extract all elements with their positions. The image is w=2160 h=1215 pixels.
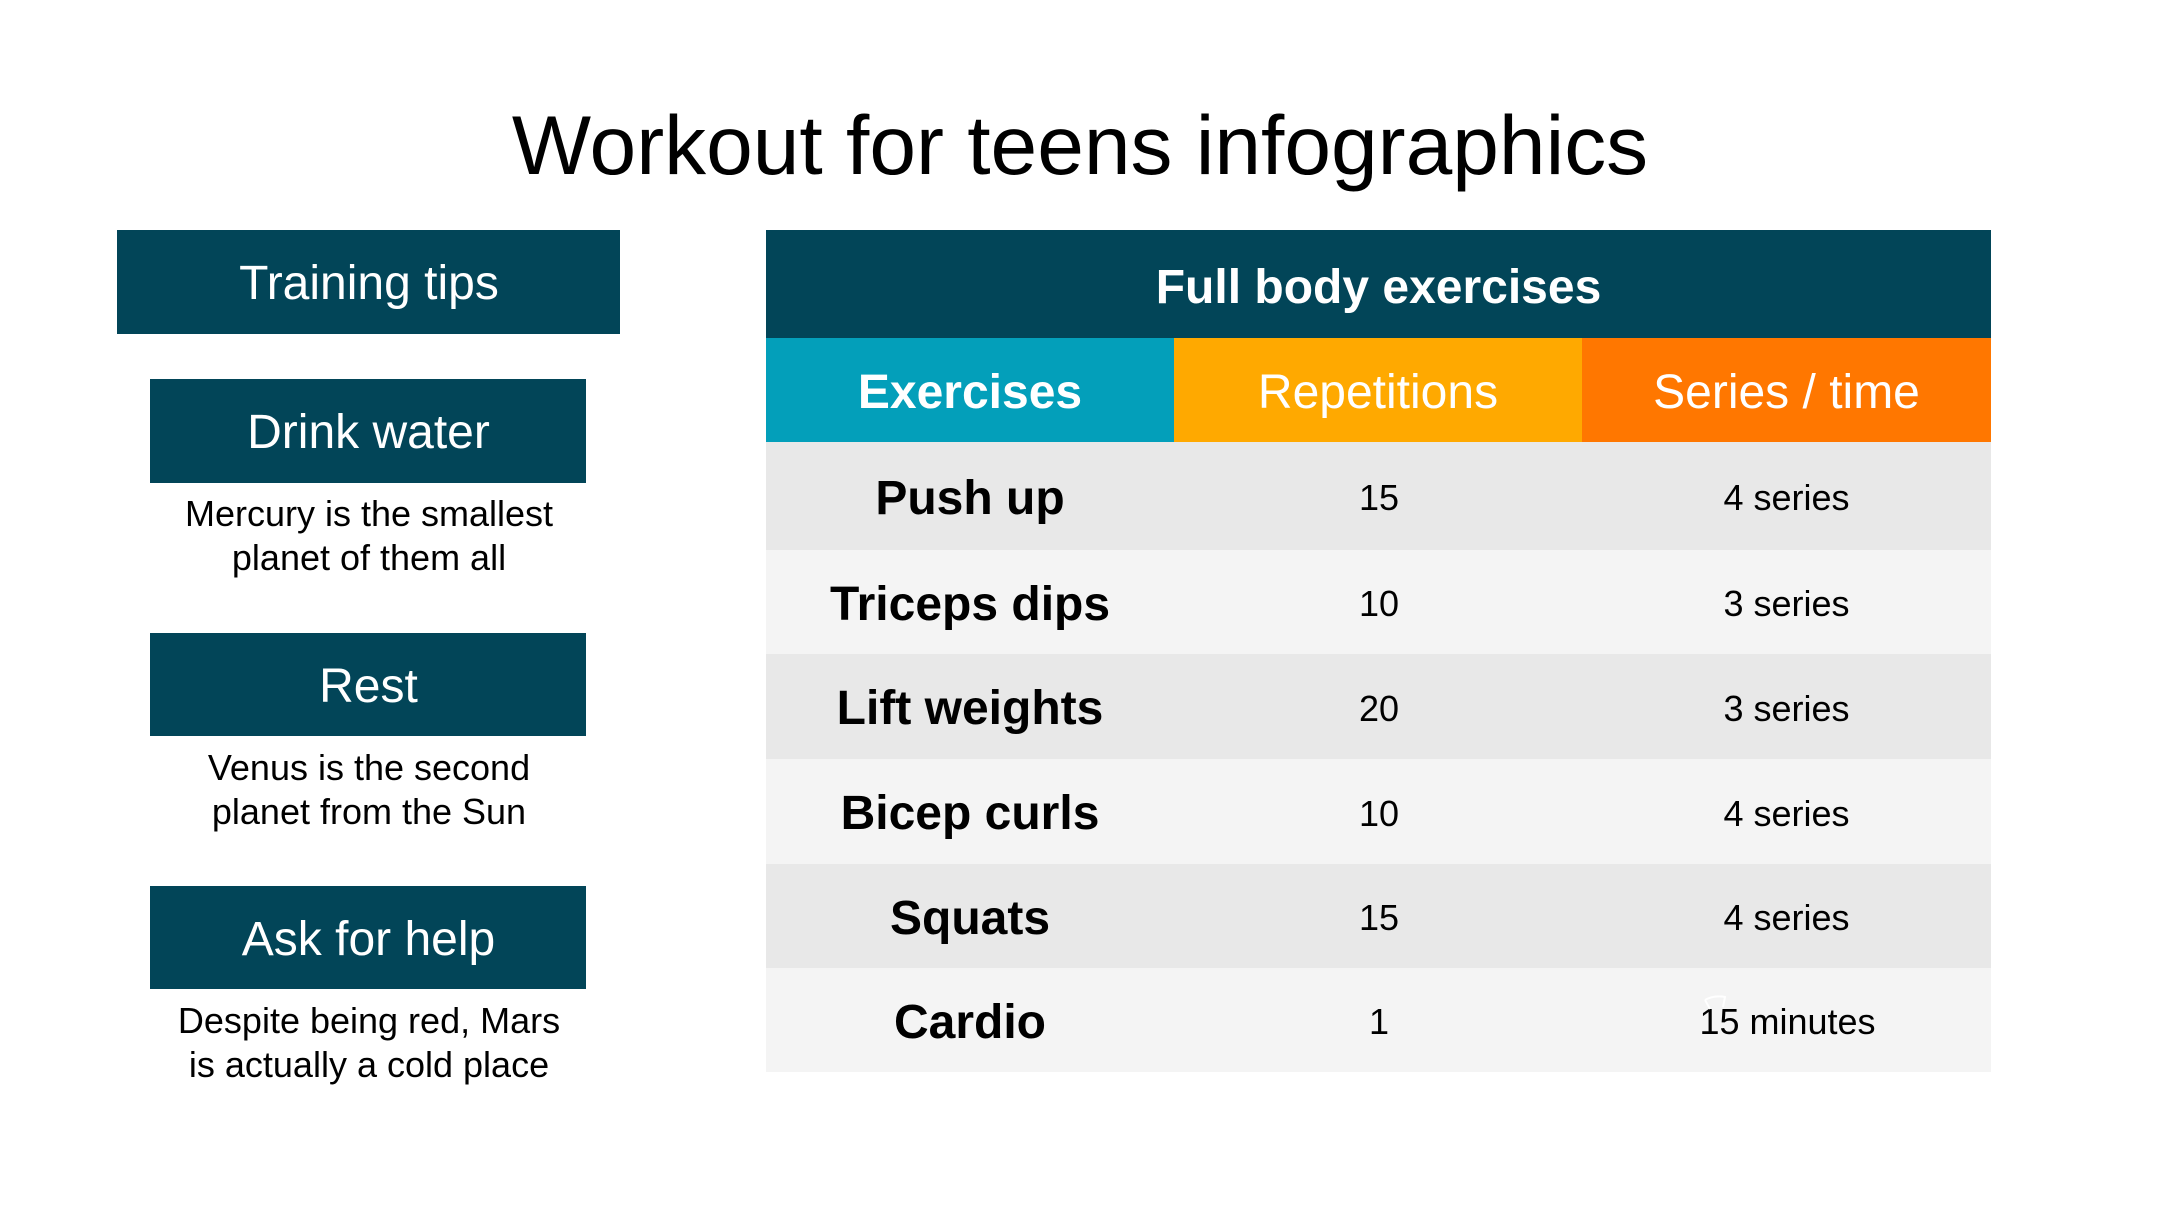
- row: cardio: [766, 968, 1991, 1072]
- row: lift weights: 20: [1359, 688, 1399, 728]
- tip: rest: [150, 633, 586, 832]
- tip text: planet of them all: [232, 537, 506, 578]
- row: lift weights: 3 series: [1723, 688, 1850, 728]
- row: cardio: 15 minutes: [1699, 1001, 1876, 1042]
- tip text: [185, 493, 553, 578]
- heading: training tips: Training tips: [239, 257, 499, 310]
- row: push up: Push up: [875, 472, 1065, 524]
- icon: small white arc over the 15 minutes label: [1704, 996, 1726, 1010]
- tip heading: Rest: [319, 660, 418, 713]
- row: squats: Squats: [890, 892, 1050, 944]
- column header: series / time: [1582, 338, 1991, 442]
- column header: exercises: [766, 338, 1174, 442]
- row: bicep curls: 10: [1359, 792, 1399, 834]
- tip heading: Ask for help: [242, 913, 495, 966]
- table title: [766, 230, 1991, 338]
- tip text: is actually a cold place: [189, 1044, 549, 1085]
- row: push up: 15: [1359, 477, 1399, 518]
- row: squats: [766, 864, 1991, 968]
- tip heading: Drink water: [247, 406, 490, 459]
- row: bicep curls: [766, 759, 1991, 864]
- row: triceps dips: Triceps dips: [830, 578, 1110, 630]
- tip heading: [150, 633, 586, 736]
- table title: Full body exercises: [1156, 261, 1601, 314]
- row: cardio: Cardio: [894, 996, 1046, 1048]
- row: squats: 15: [1359, 897, 1399, 938]
- tip text: Mercury is the smallest: [185, 493, 553, 534]
- tip text: Venus is the second: [208, 747, 530, 788]
- tip text: Despite being red, Mars: [178, 1000, 560, 1041]
- row: triceps dips: [766, 550, 1991, 654]
- row: cardio: 1: [1369, 1001, 1389, 1042]
- row: triceps dips: 3 series: [1723, 583, 1850, 624]
- row: lift weights: Lift weights: [837, 682, 1103, 735]
- tip text: [208, 747, 530, 832]
- column header: series / time: Series / time: [1653, 366, 1920, 418]
- column header: repetitions: [1174, 338, 1582, 442]
- row: push up: [766, 442, 1991, 550]
- tip heading: [150, 886, 586, 989]
- table: full body exercises: [766, 230, 1991, 1072]
- tip: drink water: [150, 379, 586, 578]
- row: squats: 4 series: [1723, 897, 1850, 938]
- tip: ask for help: [150, 886, 586, 1085]
- row: lift weights: [766, 654, 1991, 759]
- heading: training tips: [117, 230, 620, 334]
- row: bicep curls: Bicep curls: [841, 787, 1099, 840]
- row: push up: 4 series: [1723, 477, 1850, 518]
- column header: repetitions: Repetitions: [1258, 366, 1498, 418]
- row: triceps dips: 10: [1359, 583, 1399, 624]
- column header: exercises: Exercises: [858, 366, 1082, 418]
- tip heading: [150, 379, 586, 483]
- row: bicep curls: 4 series: [1723, 792, 1850, 834]
- tip text: [178, 1000, 560, 1085]
- tip text: planet from the Sun: [212, 791, 526, 832]
- title: Workout for teens infographics: [512, 98, 1648, 192]
